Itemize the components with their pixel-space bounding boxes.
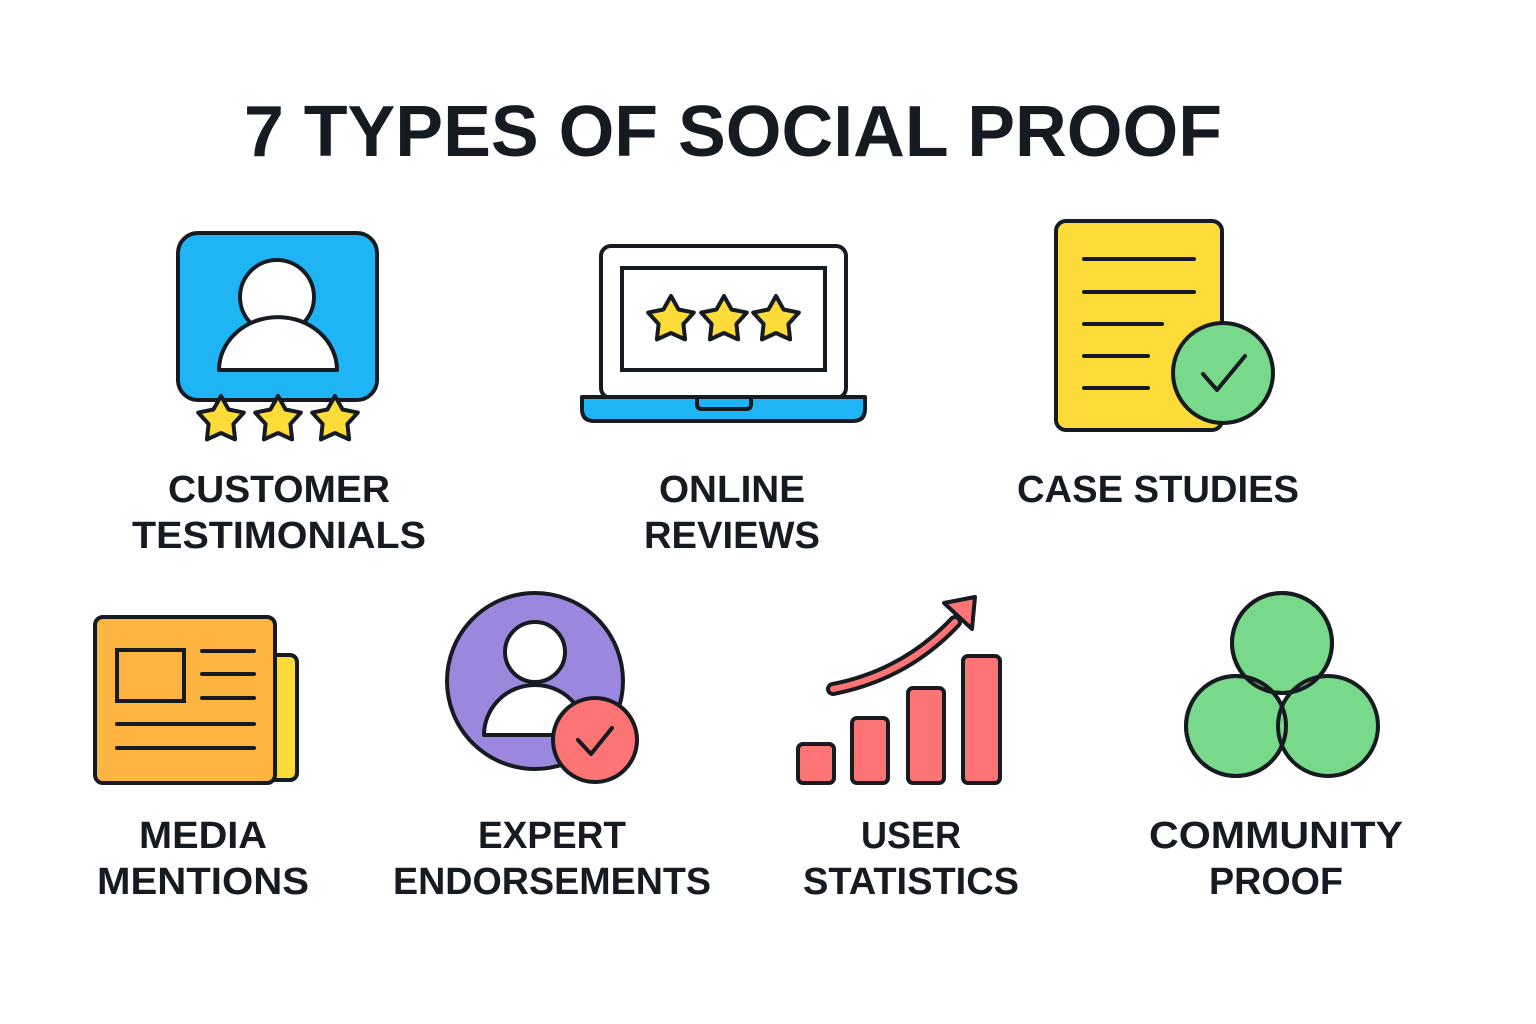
label: community proof: COMMUNITY: [1149, 815, 1403, 857]
label: expert endorsements: [393, 815, 711, 903]
label: expert endorsements: EXPERT: [478, 815, 626, 857]
label: customer testimonials: CUSTOMER: [168, 469, 390, 511]
icon: online reviews laptop: [582, 246, 865, 421]
label: media mentions: [97, 815, 309, 903]
label: media mentions: MEDIA: [139, 815, 267, 857]
icon: user statistics chart: [798, 597, 1000, 783]
label: online reviews: ONLINE: [659, 469, 805, 511]
title: 7 TYPES OF SOCIAL PROOF: [244, 92, 1222, 172]
label: customer testimonials: TESTIMONIALS: [132, 515, 426, 557]
label: online reviews: REVIEWS: [644, 515, 820, 557]
icon: community proof circles: [1186, 593, 1378, 776]
label: customer testimonials: [132, 469, 426, 557]
label: user statistics: USER: [861, 815, 961, 857]
label: user statistics: STATISTICS: [803, 861, 1019, 903]
icon: customer testimonials: [178, 233, 377, 439]
icon: case studies document: [1056, 221, 1273, 430]
label: media mentions: MENTIONS: [97, 861, 309, 903]
label: expert endorsements: ENDORSEMENTS: [393, 861, 711, 903]
icon: expert endorsements: [447, 593, 637, 782]
label: online reviews: [644, 469, 820, 557]
label: case studies: CASE STUDIES: [1017, 469, 1299, 511]
label: community proof: [1149, 815, 1403, 903]
label: user statistics: [803, 815, 1019, 903]
icon: media mentions newspaper: [95, 617, 297, 783]
label: community proof: PROOF: [1209, 861, 1343, 903]
